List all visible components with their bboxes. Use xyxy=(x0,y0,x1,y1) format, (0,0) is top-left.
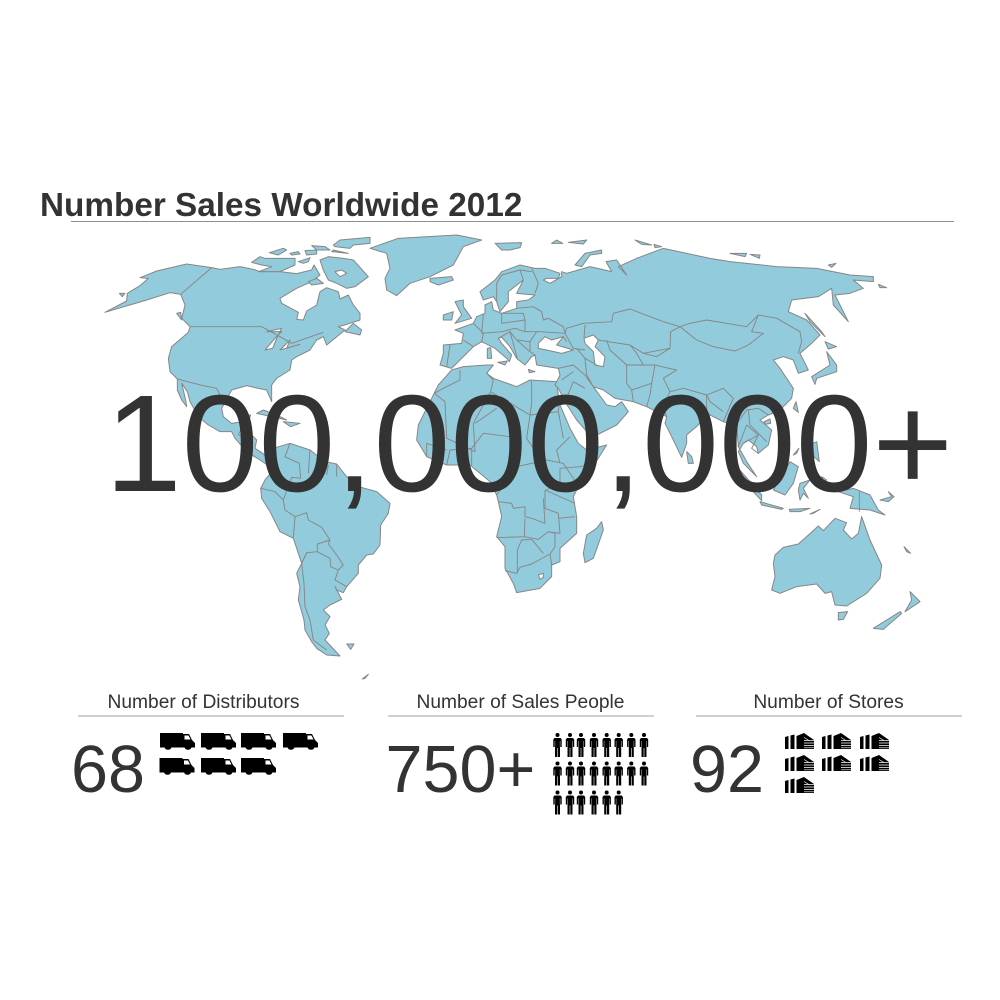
great lakes xyxy=(265,328,282,350)
eurasia xyxy=(430,240,887,477)
asia borders xyxy=(565,309,802,353)
north africa borders xyxy=(434,370,563,458)
caribbean islands xyxy=(257,410,287,420)
japan and east asian islands xyxy=(805,313,825,337)
building icons xyxy=(785,733,889,793)
south america borders xyxy=(261,443,337,538)
greenland xyxy=(370,235,482,296)
value: sales people: 750+ xyxy=(386,733,535,807)
panel: sales people xyxy=(386,692,654,814)
heading: stores: Number of Stores xyxy=(753,692,904,713)
value: stores: 92 xyxy=(690,733,764,807)
panel: stores xyxy=(690,692,962,807)
caspian sea xyxy=(584,335,605,367)
truck icons xyxy=(160,733,318,775)
arctic islands xyxy=(495,243,522,250)
black sea xyxy=(538,337,573,353)
person icons xyxy=(553,733,648,814)
european islands xyxy=(455,300,472,323)
southeast asia and oceania xyxy=(738,442,920,629)
south america xyxy=(261,443,390,679)
europe borders xyxy=(447,307,565,367)
title rule xyxy=(71,221,954,222)
world map xyxy=(105,235,920,679)
africa xyxy=(417,365,607,593)
southern africa borders xyxy=(497,490,575,573)
canadian arctic islands xyxy=(320,257,368,288)
heading: sales people: Number of Sales People xyxy=(417,692,624,713)
canada and us borders xyxy=(181,268,323,343)
panel: distributors xyxy=(71,692,344,807)
headline number: 100,000,000+ xyxy=(105,367,953,521)
value: distributors: 68 xyxy=(71,733,145,807)
heading: distributors: Number of Distributors xyxy=(108,692,299,713)
north america xyxy=(105,235,482,470)
title: Number Sales Worldwide 2012 xyxy=(40,187,522,224)
madagascar xyxy=(583,522,603,563)
